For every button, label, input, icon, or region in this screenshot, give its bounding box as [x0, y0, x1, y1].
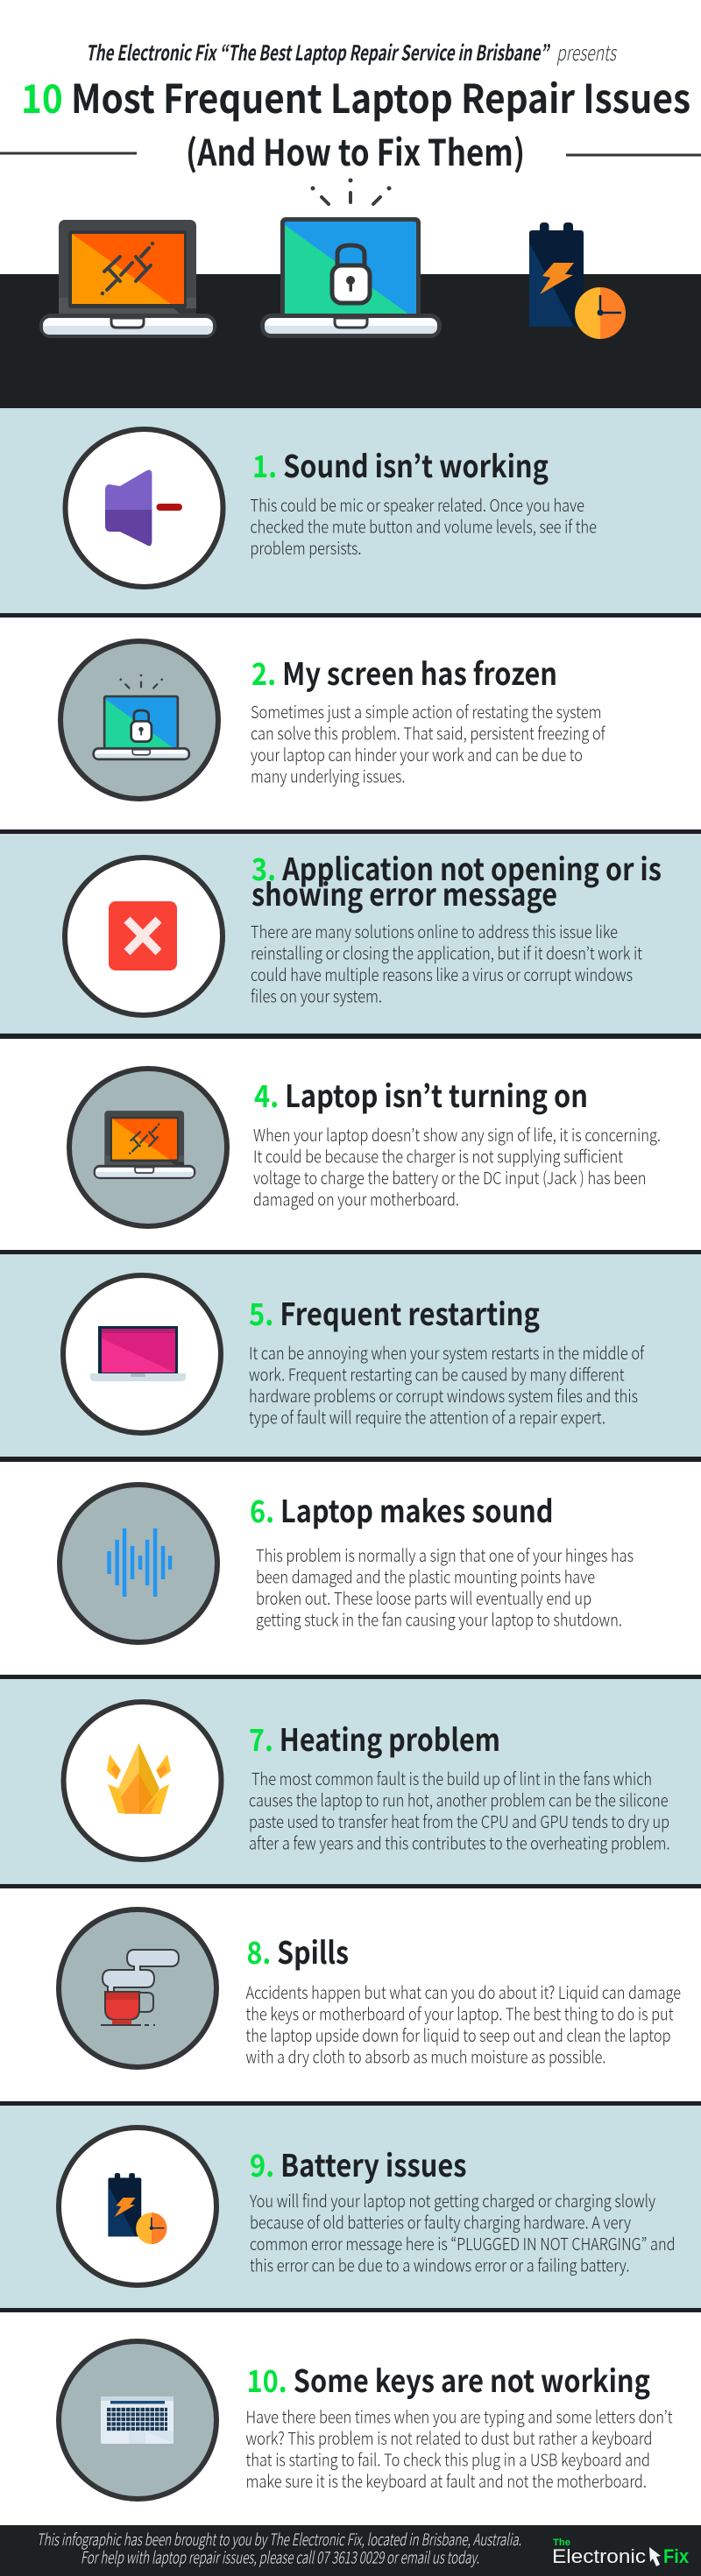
icon: steaming mug [101, 1950, 179, 2026]
panel: issue 8 [0, 1888, 701, 2106]
heading: 10. Some keys are not working [247, 2357, 650, 2402]
body text: can solve this problem. That said, persistent freezing of [251, 720, 605, 745]
panel: issue 5 [0, 1254, 701, 1462]
panel: issue 2 [0, 618, 701, 834]
circle badge [65, 857, 223, 1015]
body text: could have multiple reasons like a virus or corrupt windows [251, 961, 633, 986]
body text: checked the mute button and volume levels, see if the [251, 513, 597, 538]
circle badge [65, 429, 223, 587]
body text [251, 698, 605, 788]
body text [251, 491, 597, 560]
body text: getting stuck in the fan causing your laptop to shutdown. [256, 1606, 622, 1631]
body text [249, 1339, 645, 1429]
subtitle rule right [566, 154, 701, 156]
icon: battery and clock [529, 222, 626, 339]
heading: 7. Heating problem [249, 1716, 500, 1761]
body text: Sometimes just a simple action of restating the system [251, 698, 601, 723]
body text [253, 1121, 661, 1210]
logo [552, 2537, 690, 2567]
body text: because of old batteries or faulty charging hardware. A very [250, 2209, 631, 2234]
icon: broken laptop [94, 1111, 195, 1179]
heading: showing error message [251, 871, 557, 915]
heading: 4. Laptop isn’t turning on [254, 1072, 588, 1117]
panel: issue 4 [0, 1039, 701, 1254]
panel: issue 6 [0, 1462, 701, 1679]
footer text [37, 2528, 521, 2568]
body text: This problem is normally a sign that one of your hinges has [256, 1542, 634, 1567]
panel: issue 10 [0, 2312, 701, 2525]
heading: 9. Battery issues [250, 2142, 466, 2186]
icon: broken laptop [39, 220, 216, 338]
body text [250, 2187, 675, 2277]
icon: keyboard [101, 2396, 173, 2444]
body text: This could be mic or speaker related. Once you have [251, 491, 584, 517]
icon: frozen locked laptop [260, 179, 442, 338]
body text: It could be because the charger is not supplying sufficient [253, 1142, 623, 1168]
circle badge [60, 641, 218, 799]
footer text: For help with laptop repair issues, please call 07 3613 0029 or email us today. [81, 2545, 479, 2568]
body text: files on your system. [251, 983, 382, 1007]
icon: pink laptop [90, 1326, 186, 1381]
presenter line: presents [556, 36, 618, 67]
heading: 2. My screen has frozen [251, 650, 557, 695]
icon: muted speaker [105, 470, 182, 546]
subtitle: (And How to Fix Them) [186, 124, 525, 176]
body text: There are many solutions online to address this issue like [251, 918, 618, 943]
body text: reinstalling or closing the application, but if it doesn’t work it [251, 939, 642, 965]
icon: battery and clock [108, 2173, 167, 2244]
logo: Fix [663, 2545, 690, 2567]
icon: error box [109, 901, 177, 970]
body text: been damaged and the plastic mounting points have [256, 1563, 595, 1589]
logo: Electronic [552, 2545, 646, 2567]
heading: 1. Sound isn’t working [252, 442, 549, 487]
body text: many underlying issues. [251, 762, 405, 788]
icon: sound wave [107, 1528, 172, 1597]
subtitle rule left [0, 152, 137, 154]
panel: issue 9 [0, 2106, 701, 2312]
body text [256, 1542, 634, 1631]
body text: your laptop can hinder your work and can be due to [251, 741, 583, 766]
body text: broken out. These loose parts will eventually end up [256, 1584, 591, 1610]
circle badge [59, 1909, 216, 2067]
body text [245, 1979, 681, 2069]
circle badge [69, 1069, 227, 1226]
footer text: This infographic has been brought to you by The Electronic Fix, located in Brisbane, Australia. [37, 2528, 521, 2551]
footer panel [0, 2525, 701, 2576]
heading: 5. Frequent restarting [249, 1290, 540, 1335]
circle badge [63, 1275, 221, 1433]
body text [249, 1765, 669, 1855]
body text: problem persists. [251, 534, 361, 560]
panel: issue 7 [0, 1679, 701, 1888]
body text [245, 2403, 673, 2493]
body text: damaged on your motherboard. [253, 1186, 459, 1210]
body text: hardware problems or corrupt windows system files and this [249, 1382, 638, 1408]
panel: issue 3 [0, 834, 701, 1039]
circle badge [59, 2128, 216, 2285]
heading: 6. Laptop makes sound [250, 1487, 554, 1532]
heading [251, 845, 662, 915]
panel: issue 1 [0, 408, 701, 618]
icon: flame crown [107, 1743, 171, 1814]
icon: locked laptop [92, 674, 190, 760]
header panel [0, 0, 701, 408]
body text: with a dry cloth to absorb as much moisture as possible. [245, 2043, 606, 2069]
circle badge [59, 2341, 216, 2499]
body text [251, 918, 642, 1007]
body text: this error can be due to a windows error or a failing battery. [250, 2251, 629, 2277]
heading: 8. Spills [247, 1929, 349, 1973]
circle badge [60, 1485, 217, 1642]
circle badge [63, 1702, 221, 1860]
body text: work. Frequent restarting can be caused by many different [249, 1361, 625, 1386]
body text: type of fault will require the attention of a repair expert. [249, 1403, 605, 1429]
logo: The [553, 2537, 570, 2548]
